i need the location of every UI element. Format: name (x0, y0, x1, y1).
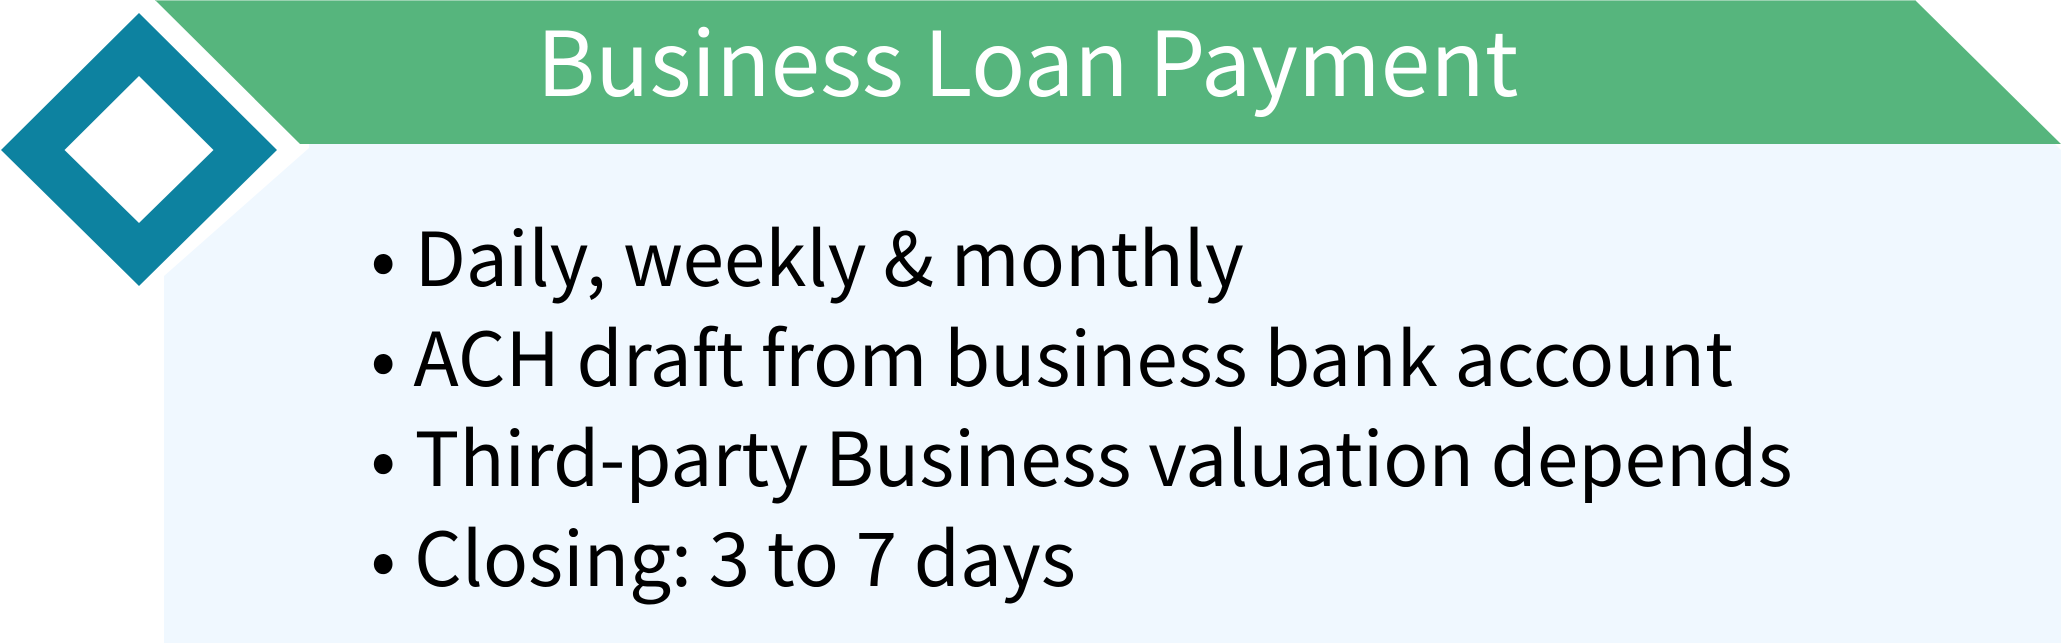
bullet: payment frequency: • Daily, weekly & monthly (370, 200, 1244, 308)
text block: bullet list (370, 200, 1792, 608)
bullet: valuation: • Third-party Business valuation depends (370, 400, 1792, 508)
bullet: closing time: • Closing: 3 to 7 days (370, 500, 1076, 608)
icon: teal diamond outline (1, 13, 277, 286)
panel: details background (164, 144, 2061, 643)
header: green banner (155, 0, 2061, 144)
bullet: ACH draft: • ACH draft from business bank account (370, 300, 1733, 408)
